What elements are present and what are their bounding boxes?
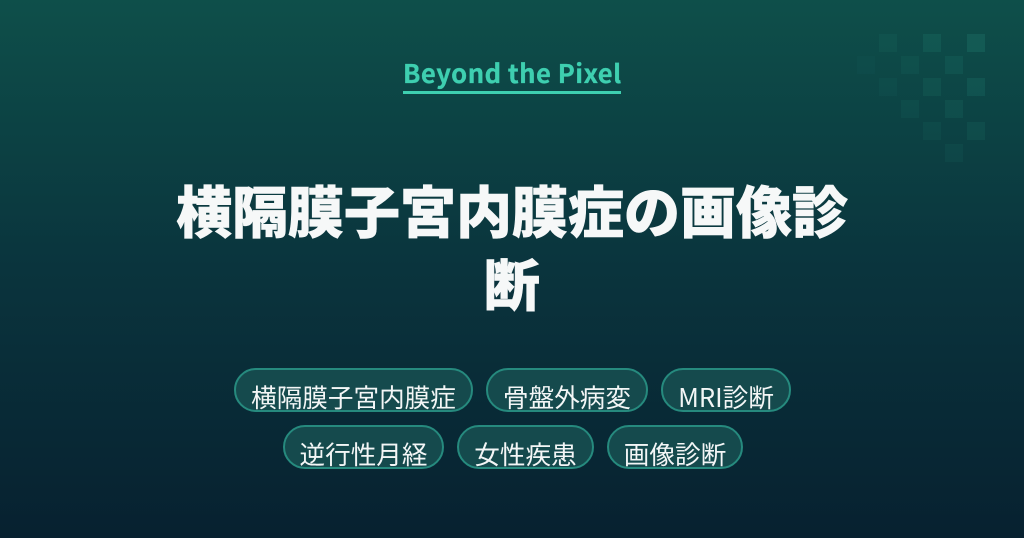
tag: 骨盤外病変 — [486, 368, 648, 412]
tag: MRI診断: MRI診断 — [678, 378, 774, 415]
tag: 横隔膜子宮内膜症: 横隔膜子宮内膜症 — [251, 378, 456, 415]
tags — [234, 368, 791, 472]
title: 断 — [484, 242, 540, 323]
brand label: Beyond the Pixel — [403, 54, 622, 91]
tag: 女性疾患 — [457, 425, 594, 469]
tag: 画像診断: 画像診断 — [624, 435, 726, 472]
decorative pixel grid — [923, 34, 985, 140]
tag: 逆行性月経 — [283, 425, 444, 469]
tag: MRI診断 — [661, 368, 791, 412]
title: 横隔膜子宮内膜症の画像診 — [176, 169, 848, 250]
tag: 骨盤外病変: 骨盤外病変 — [503, 378, 631, 415]
tag: 横隔膜子宮内膜症 — [234, 368, 473, 412]
title — [176, 169, 848, 323]
tag: 女性疾患: 女性疾患 — [474, 435, 577, 472]
tag: 逆行性月経: 逆行性月経 — [300, 435, 427, 472]
tag: 画像診断 — [607, 425, 743, 469]
